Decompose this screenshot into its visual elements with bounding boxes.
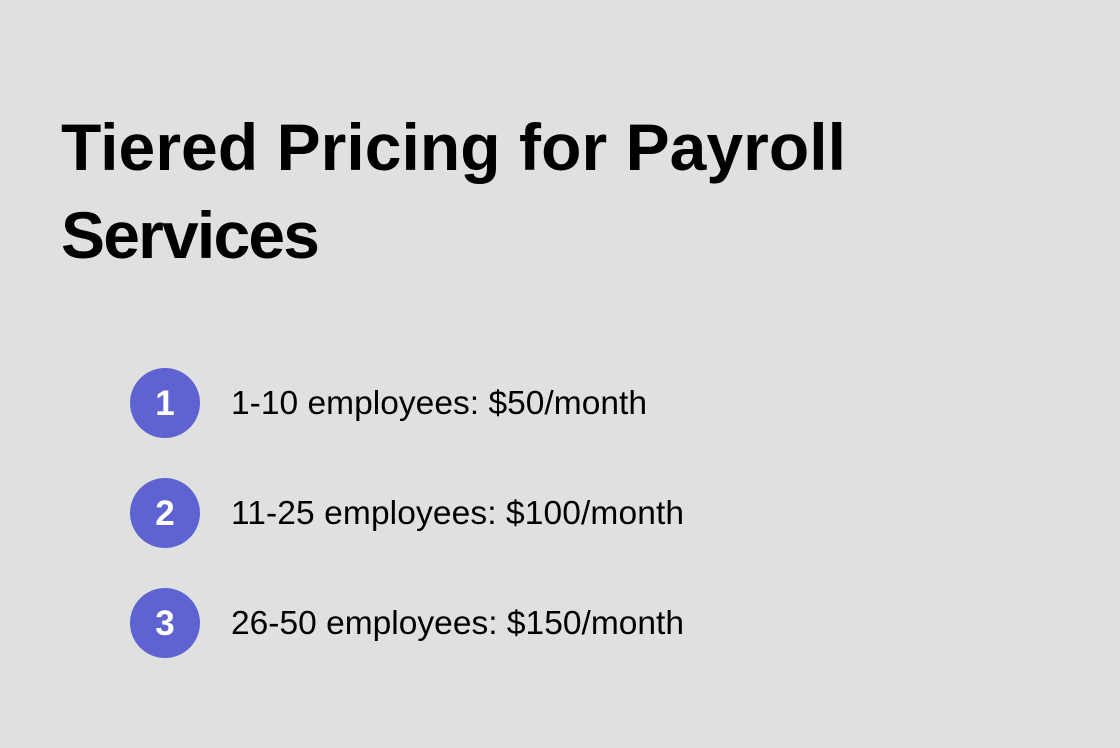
tier 1 [130,368,647,438]
badge: number 1: 1 [155,384,175,423]
tier 2 label: 11-25 employees: $100/month [231,495,684,532]
badge: number 3: 3 [155,604,175,643]
badge: number 3 [130,588,200,658]
title: Tiered Pricing for Payroll [61,110,846,184]
tier 2 [130,478,684,548]
tier 1 label: 1-10 employees: $50/month [231,385,647,422]
title: Services [61,198,320,272]
badge: number 2 [130,478,200,548]
badge: number 1 [130,368,200,438]
badge: number 2: 2 [155,494,175,533]
tier 3 [130,588,684,658]
title [61,110,846,272]
tier 3 label: 26-50 employees: $150/month [231,605,684,642]
